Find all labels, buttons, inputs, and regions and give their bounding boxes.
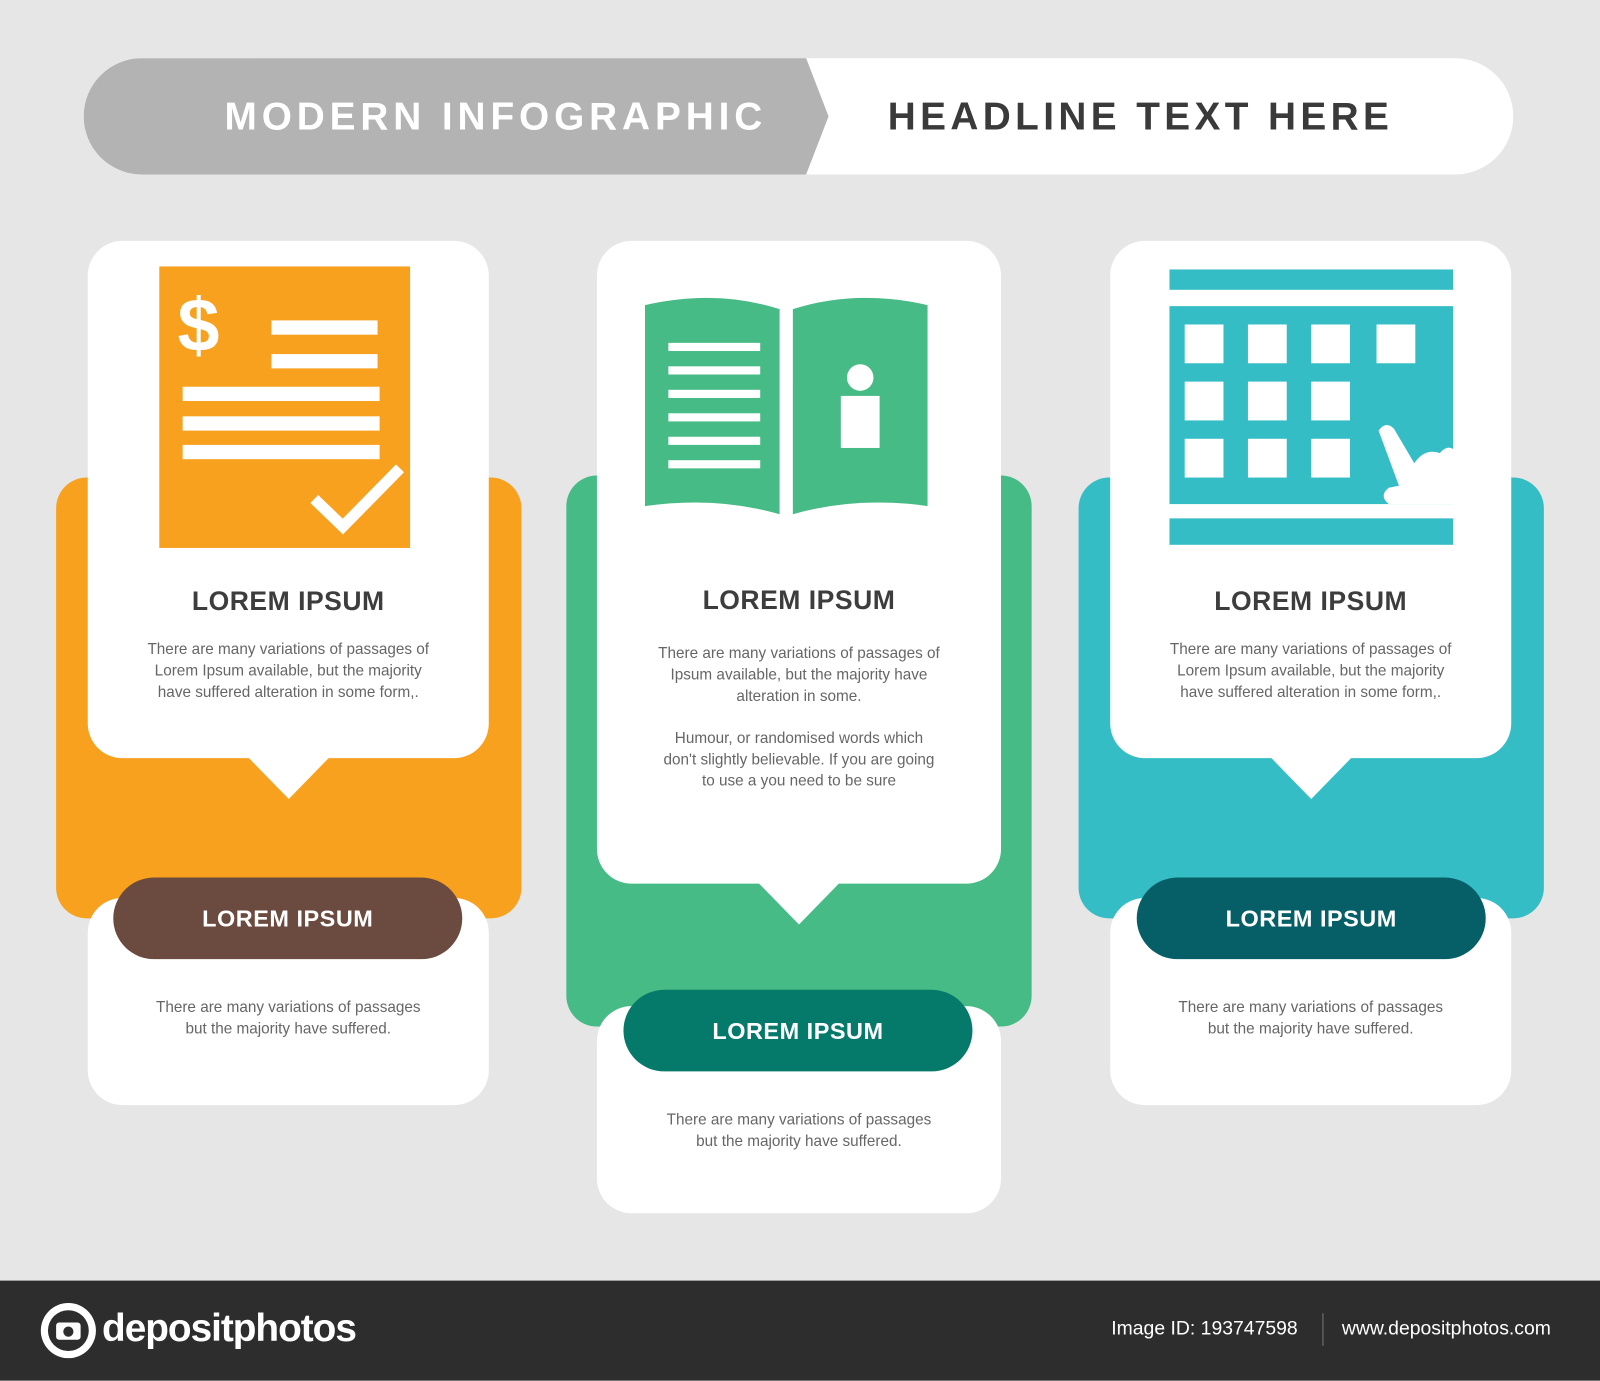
footer bar: [0, 1281, 1600, 1381]
icon: calendar touch: [1169, 269, 1453, 545]
logo: [40, 1303, 356, 1358]
website: www.depositphotos.com: [1342, 1318, 1551, 1340]
text: [658, 645, 940, 790]
heading: LOREM IPSUM: [192, 586, 385, 616]
bottom text: but the majority have suffered.: [1208, 1020, 1414, 1038]
pill button: [1137, 878, 1486, 959]
text: [147, 641, 429, 701]
text: There are many variations of passages of: [1170, 641, 1452, 658]
panel: left orange: [56, 241, 522, 1105]
text: Humour, or randomised words which: [675, 730, 923, 747]
bottom text: [156, 999, 421, 1038]
bottom text: [666, 1111, 931, 1150]
image id: Image ID: 193747598: [1111, 1318, 1298, 1340]
panel: middle green: [566, 241, 1032, 1214]
header banner: [84, 58, 1513, 174]
bottom text: but the majority have suffered.: [696, 1133, 902, 1150]
bottom text: There are many variations of passages: [1178, 999, 1443, 1016]
text: Lorem Ipsum available, but the majority: [155, 662, 422, 680]
pill button: LOREM IPSUM: [202, 905, 373, 932]
text: don't slightly believable. If you are going: [663, 751, 934, 768]
text: alteration in some.: [736, 688, 862, 705]
icon: invoice: [159, 266, 410, 548]
text: There are many variations of passages of: [658, 645, 940, 662]
title right: HEADLINE TEXT HERE: [888, 96, 1393, 139]
text: to use a you need to be sure: [702, 772, 896, 790]
logo: depositphotos: [102, 1307, 356, 1350]
pill button: [113, 878, 462, 959]
icon: book: [645, 298, 928, 514]
text: Lorem Ipsum available, but the majority: [1177, 662, 1444, 680]
text: There are many variations of passages of: [147, 641, 429, 658]
text: [1170, 641, 1452, 701]
title left: MODERN INFOGRAPHIC: [224, 96, 767, 139]
pill button: [623, 990, 972, 1071]
pill button: LOREM IPSUM: [1226, 905, 1397, 932]
bottom text: [1178, 999, 1443, 1038]
heading: LOREM IPSUM: [703, 585, 895, 615]
bottom text: but the majority have suffered.: [185, 1020, 391, 1038]
panel: right teal: [1078, 241, 1544, 1105]
text: have suffered alteration in some form,.: [1180, 684, 1441, 701]
icon: invoice: $: [178, 284, 220, 368]
pill button: LOREM IPSUM: [712, 1017, 884, 1044]
heading: LOREM IPSUM: [1214, 586, 1407, 616]
bottom text: There are many variations of passages: [667, 1111, 931, 1129]
bottom text: There are many variations of passages: [156, 999, 421, 1016]
text: Ipsum available, but the majority have: [671, 666, 927, 684]
text: have suffered alteration in some form,.: [158, 684, 419, 701]
